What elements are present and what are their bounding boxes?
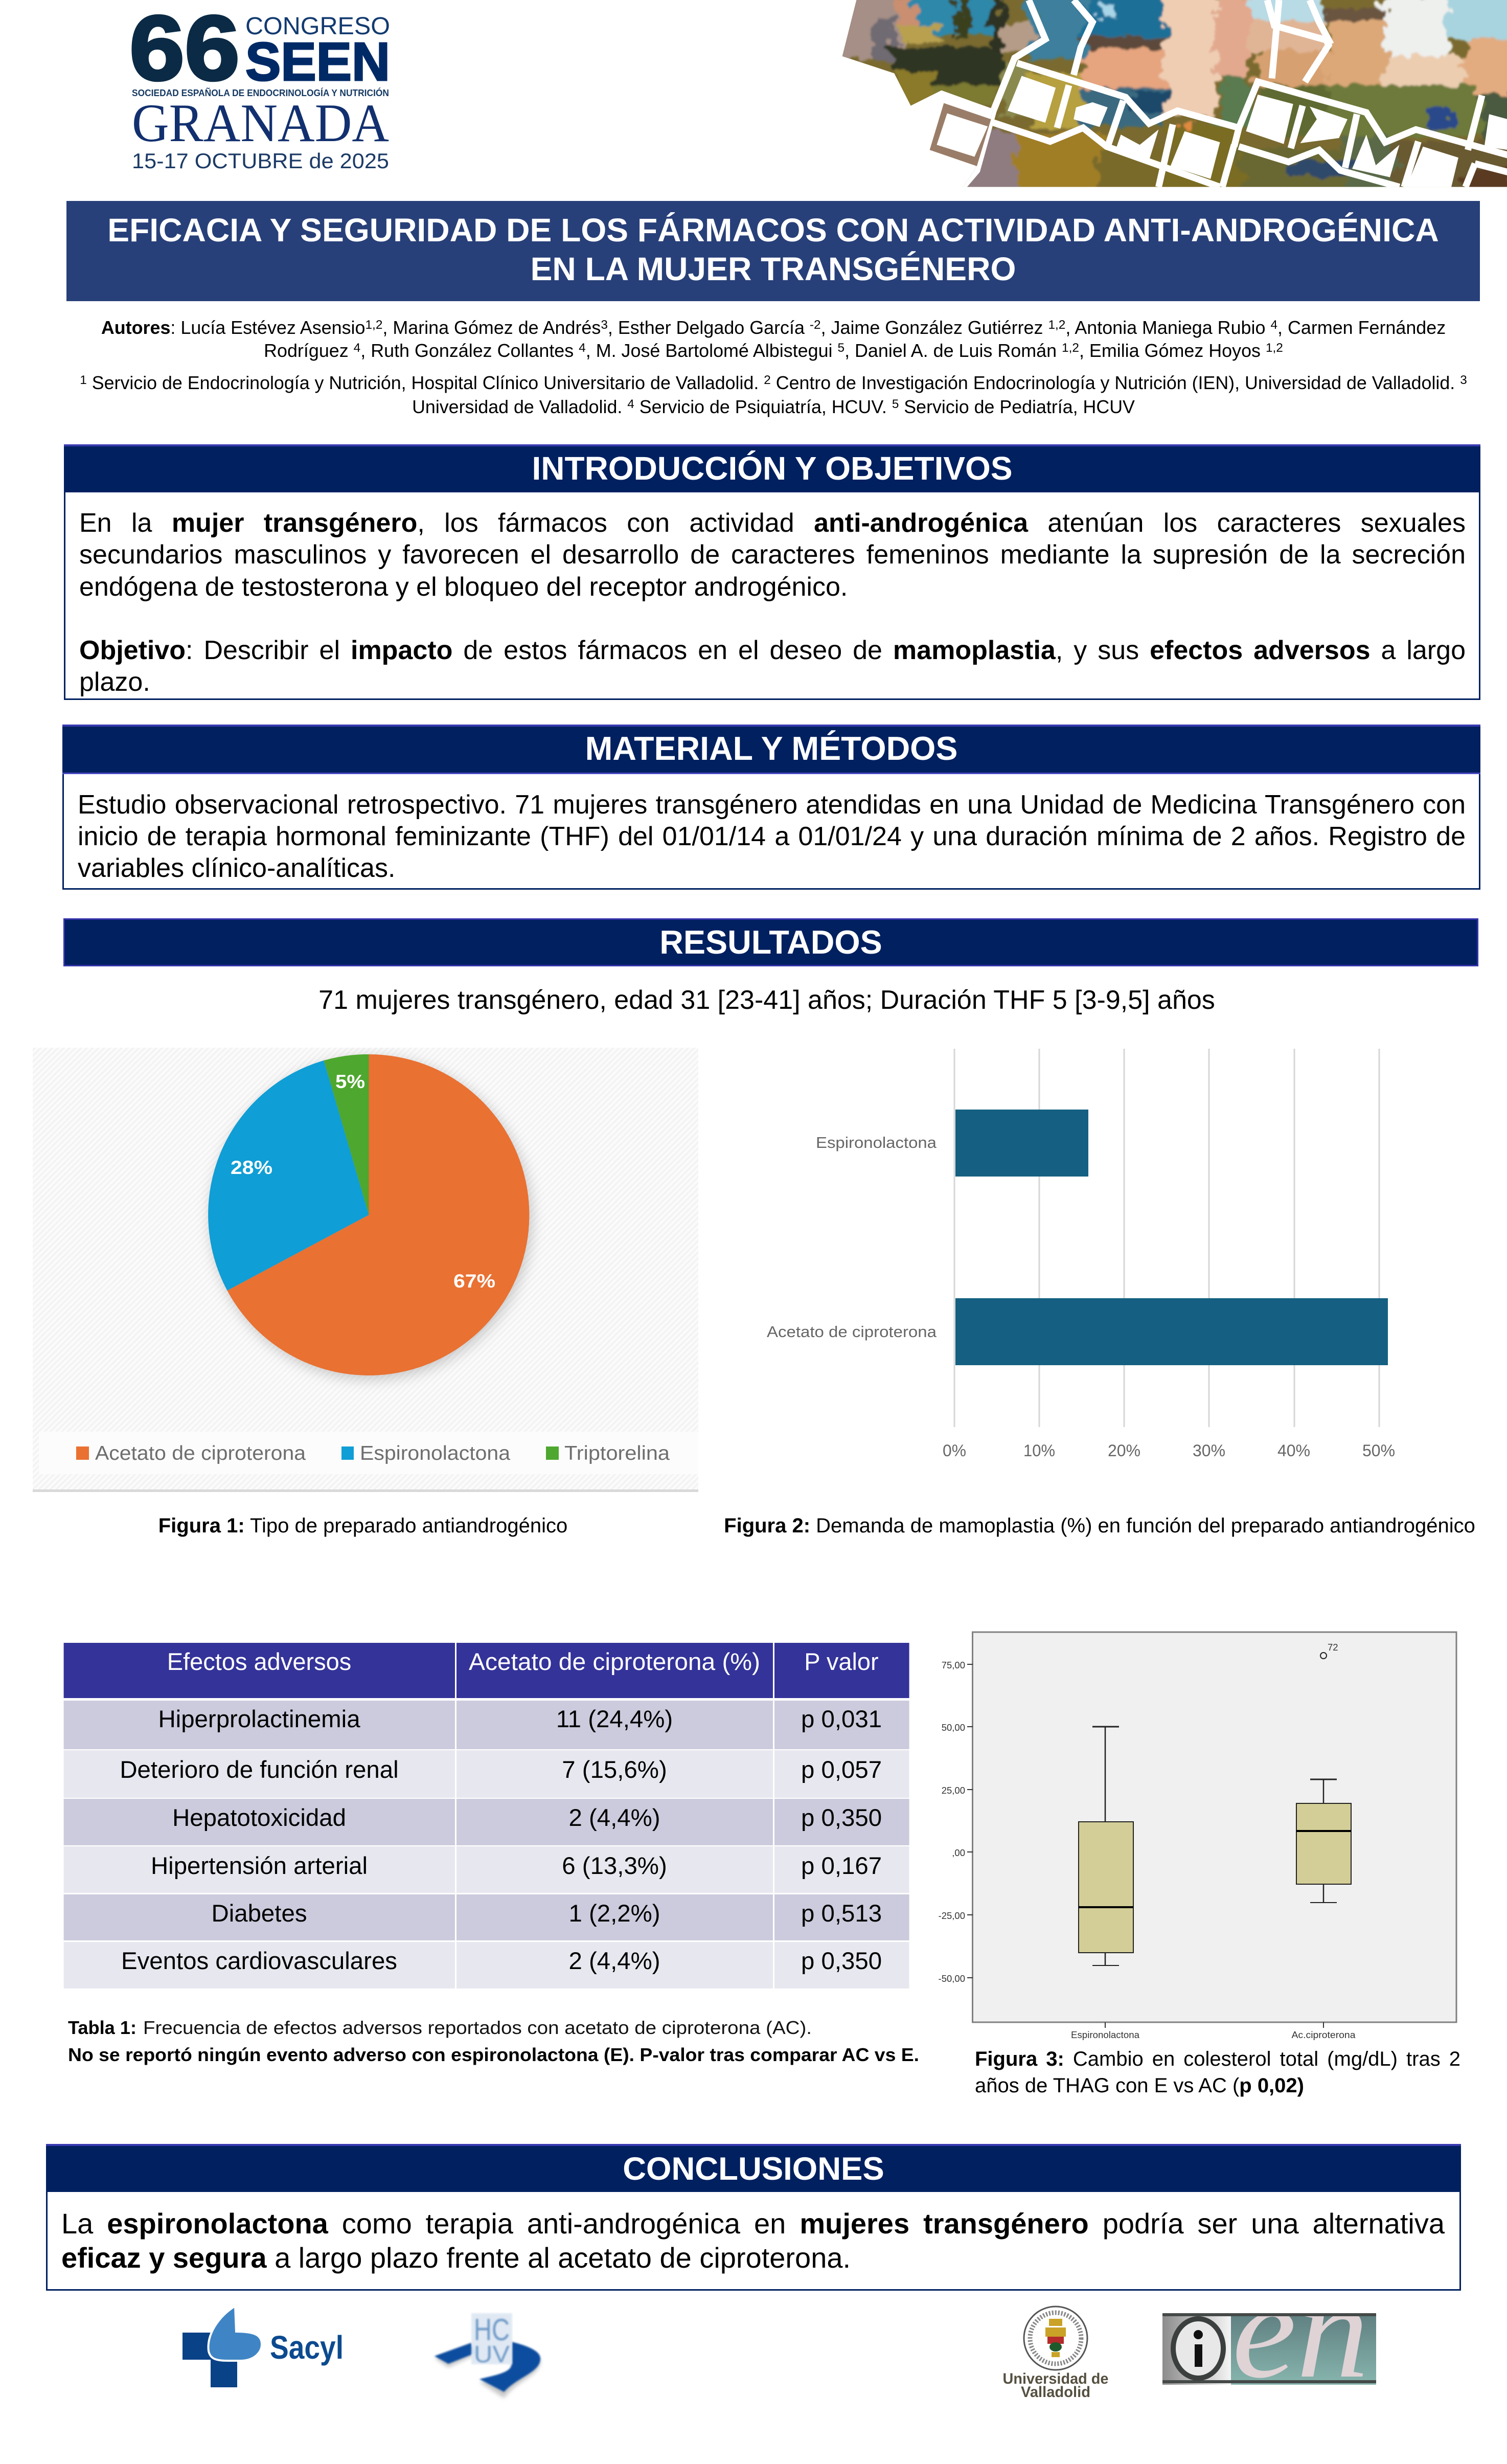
header image: Alhambra mosaic (842, 0, 1507, 187)
logo: Universidad de Valladolid: Valladolid (1021, 2384, 1090, 2401)
table rows: 2 (4,4%) (568, 1804, 660, 1832)
slice: triptorelina 5% (324, 1054, 369, 1215)
logo: HCUV: HC (474, 2313, 510, 2347)
bar: acetato de ciproterona (955, 1298, 1388, 1365)
figure 2 caption: Figura 2: Demanda de mamoplastia (%) en función del preparado antiandrogénico (724, 1514, 1475, 1537)
heading: introducción y objetivos (64, 444, 1480, 492)
methods text: variables clínico-analíticas. (78, 853, 395, 883)
introduction text: plazo. (79, 667, 150, 697)
introduction text: endógena de testosterona y el bloqueo del receptor androgénico. (79, 572, 848, 602)
outlier 72: 72 (1328, 1642, 1338, 1653)
table rows (64, 1643, 909, 1988)
y axis: 50,00 (942, 1722, 965, 1733)
value axis labels: 0% (943, 1441, 966, 1460)
introduction text: En la mujer transgénero, los fármacos con actividad anti-androgénica atenúan los caracteres sexuales (79, 508, 1466, 538)
y axis: 75,00 (942, 1660, 965, 1670)
table 1 caption: No se reportó ningún evento adverso con espironolactona (E). P-valor tras comparar AC vs E. (68, 2044, 919, 2065)
table rows: Diabetes (211, 1900, 307, 1927)
logo word GRANADA: GRANADA (132, 93, 389, 153)
introduction text: secundarios masculinos y favorecen el desarrollo de caracteres femeninos mediante la supresión de la secreción (79, 540, 1466, 570)
figure 3 caption (975, 2048, 1460, 2097)
category labels (767, 1134, 937, 1341)
logo dates: 15-17 OCTUBRE de 2025 (132, 149, 389, 173)
table rows: 1 (2,2%) (568, 1900, 660, 1927)
table rows: 7 (15,6%) (562, 1756, 667, 1783)
table rows: Hepatotoxicidad (172, 1804, 346, 1832)
logo: IEN (1162, 2313, 1376, 2385)
table rows: Hipertensión arterial (151, 1852, 368, 1880)
table 1 caption: Frecuencia de efectos adversos reportados con acetato de ciproterona (AC). (143, 2017, 812, 2038)
conclusions text: eficaz y segura a largo plazo frente al acetato de ciproterona. (61, 2242, 851, 2274)
table header row: Efectos adversos (167, 1648, 351, 1675)
table header row: P valor (804, 1648, 879, 1675)
table rows: 2 (4,4%) (568, 1948, 660, 1975)
authors and affiliations: Rodríguez 4, Ruth González Collantes 4, M. José Bartolomé Albistegui 5, Daniel A. de Luis Román 1,2, Emilia Gómez Hoyos 1,2 (264, 341, 1283, 361)
pie legend (76, 1442, 670, 1464)
heading: introducción y objetivos: INTRODUCCIÓN Y OBJETIVOS (532, 450, 1012, 487)
box: acetato de ciproterona (1296, 1779, 1351, 1903)
table rows: p 0,057 (801, 1756, 882, 1783)
table header row: Acetato de ciproterona (%) (469, 1648, 760, 1675)
table 1: adverse effects (63, 1643, 909, 1988)
value axis labels: 30% (1193, 1441, 1225, 1460)
figure 3 caption: años de THAG con E vs AC (p 0,02) (975, 2074, 1304, 2097)
logo: Sacyl (182, 2308, 344, 2387)
category labels: Espironolactona (816, 1134, 937, 1151)
logo: HCUV: UV (474, 2341, 510, 2367)
conclusions text (61, 2207, 1445, 2274)
table rows: 6 (13,3%) (562, 1852, 667, 1880)
table rows: p 0,167 (801, 1852, 882, 1880)
heading: resultados (63, 918, 1478, 966)
results summary line: 71 mujeres transgénero, edad 31 [23-41] años; Duración THF 5 [3-9,5] años (318, 985, 1215, 1015)
pie value labels: 67% (453, 1271, 495, 1292)
table rows: Eventos cardiovasculares (121, 1948, 397, 1975)
table rows: p 0,350 (801, 1804, 882, 1832)
outlier 72 (1320, 1642, 1338, 1659)
introduction text: Objetivo: Describir el impacto de estos fármacos en el deseo de mamoplastia, y sus efectos adversos a largo (79, 636, 1466, 665)
title banner: EN LA MUJER TRANSGÉNERO (531, 251, 1016, 287)
x axis labels (1071, 2022, 1356, 2040)
table rows: Hiperprolactinemia (158, 1706, 360, 1733)
slice: acetato de ciproterona 67% (227, 1054, 529, 1375)
figure 1 caption: Figura 1: Tipo de preparado antiandrogénico (158, 1514, 567, 1537)
authors and affiliations: 1 Servicio de Endocrinología y Nutrición, Hospital Clínico Universitario de Valladolid. 2 Centro de Investigación Endocrinología y Nutrición (IEN), Universidad de Valladolid. 3 (80, 373, 1467, 393)
heading: material y métodos: MATERIAL Y MÉTODOS (585, 730, 957, 767)
value axis labels: 40% (1277, 1441, 1310, 1460)
logo: 66 Congreso SEEN Granada (129, 10, 390, 173)
title banner: EFICACIA Y SEGURIDAD DE LOS FÁRMACOS CON ACTIVIDAD ANTI-ANDROGÉNICA (107, 212, 1439, 248)
table rows: 11 (24,4%) (556, 1706, 673, 1733)
y axis: -50,00 (939, 1973, 965, 1984)
heading: resultados: RESULTADOS (659, 924, 882, 961)
value axis labels: 50% (1362, 1441, 1395, 1460)
logo word SEEN: SEEN (245, 32, 390, 92)
heading: material y métodos (62, 725, 1480, 773)
x axis labels: Ac.ciproterona (1291, 2030, 1356, 2040)
methods text: Estudio observacional retrospectivo. 71 mujeres transgénero atendidas en una Unidad de Medicina Transgénero con (78, 790, 1466, 820)
table header row (64, 1643, 909, 1698)
pie legend: Acetato de ciproterona (95, 1442, 306, 1464)
value axis labels: 20% (1108, 1441, 1140, 1460)
authors and affiliations (80, 318, 1467, 417)
logo: Universidad de Valladolid: Universidad de (1003, 2370, 1108, 2387)
logo: HCUV (433, 2313, 542, 2399)
table rows: p 0,513 (801, 1900, 882, 1927)
figure 1: pie chart (33, 1048, 698, 1492)
figure 3 caption: Figura 3: Cambio en colesterol total (mg/dL) tras 2 (975, 2048, 1460, 2070)
slice: espironolactona 28% (208, 1060, 369, 1291)
panel: material y métodos (62, 725, 1480, 890)
category labels: Acetato de ciproterona (767, 1323, 937, 1341)
figure 3: box plot (939, 1631, 1457, 2040)
table rows: p 0,031 (801, 1706, 882, 1733)
authors and affiliations: Autores: Lucía Estévez Asensio1,2, Marina Gómez de Andrés3, Esther Delgado García -2, Jaime González Gutiérrez 1,2, Antonia Maniega Rubio 4, Carmen Fernández (101, 318, 1446, 338)
conclusions text: La espironolactona como terapia anti-androgénica en mujeres transgénero podría ser una alternativa (61, 2207, 1445, 2240)
methods text (78, 790, 1466, 883)
x axis labels: Espironolactona (1071, 2030, 1140, 2040)
y axis: ,00 (952, 1847, 965, 1858)
table rows: Deterioro de función renal (120, 1756, 399, 1783)
value axis labels (943, 1441, 1395, 1460)
pie value labels (231, 1071, 495, 1292)
table rows: p 0,350 (801, 1948, 882, 1975)
table 1 caption: Tabla 1: (68, 2017, 136, 2038)
y axis: -25,00 (939, 1910, 965, 1921)
heading: conclusiones (46, 2144, 1461, 2192)
pie legend: Triptorelina (564, 1442, 670, 1464)
pie value labels: 5% (335, 1071, 365, 1092)
title banner (66, 201, 1480, 301)
y axis: 25,00 (942, 1785, 965, 1796)
panel: conclusiones (46, 2144, 1461, 2291)
panel: introducción y objetivos (64, 444, 1480, 700)
box: espironolactona (1079, 1727, 1133, 1965)
value axis labels: 10% (1023, 1441, 1055, 1460)
bar: espironolactona (955, 1110, 1088, 1177)
figure 2: horizontal bar chart (767, 1049, 1395, 1460)
gridlines (954, 1049, 1379, 1427)
methods text: inicio de terapia hormonal feminizante (THF) del 01/01/14 a 01/01/24 y una duración mínima de 2 años. Registro de (78, 822, 1466, 851)
heading: conclusiones: CONCLUSIONES (623, 2151, 884, 2187)
authors and affiliations: Universidad de Valladolid. 4 Servicio de Psiquiatría, HCUV. 5 Servicio de Pediatría, HCUV (412, 397, 1135, 417)
logo word CONGRESO: CONGRESO (245, 13, 390, 40)
pie value labels: 28% (231, 1157, 272, 1178)
table 1 caption (68, 2017, 919, 2065)
introduction text (79, 508, 1466, 697)
pie legend: Espironolactona (360, 1442, 510, 1464)
y axis (939, 1660, 973, 1984)
divider under the heading (62, 773, 1480, 774)
logo: Universidad de Valladolid (1003, 2306, 1108, 2401)
